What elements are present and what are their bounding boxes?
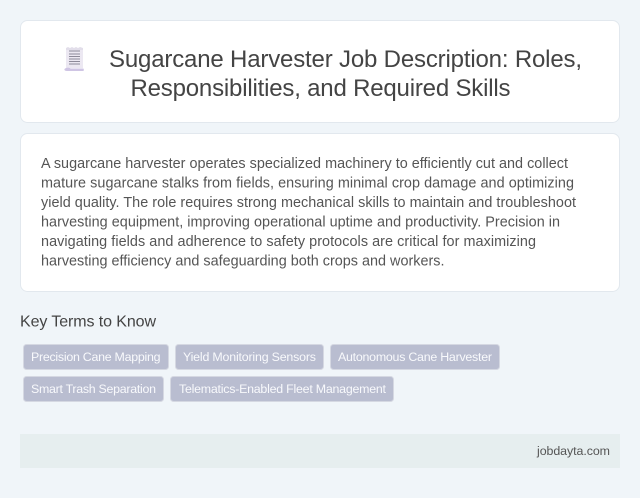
icon: document scroll xyxy=(64,47,84,71)
description text xyxy=(41,156,576,270)
description text: harvesting equipment, improving operational uptime and productivity. Precision in xyxy=(41,214,560,230)
tag: Autonomous Cane Harvester: Autonomous Cane Harvester xyxy=(338,350,492,364)
tag: Autonomous Cane Harvester xyxy=(330,344,500,370)
tag: Precision Cane Mapping xyxy=(24,344,168,370)
panel: title card xyxy=(20,20,620,122)
tag: Yield Monitoring Sensors xyxy=(176,344,324,370)
title: Sugarcane Harvester Job Description: Roles, xyxy=(109,46,582,73)
tag: Telematics-Enabled Fleet Management xyxy=(170,376,394,402)
description text: A sugarcane harvester operates specialized machinery to efficiently cut and collect xyxy=(41,156,568,172)
footer source text: jobdayta.com xyxy=(536,444,610,458)
footer bar xyxy=(20,434,620,468)
tag: Telematics-Enabled Fleet Management: Telematics-Enabled Fleet Management xyxy=(179,382,387,396)
tag: Precision Cane Mapping: Precision Cane Mapping xyxy=(31,350,161,364)
description text: navigating fields and adherence to safety protocols are critical for maximizing xyxy=(41,234,536,250)
tag: Yield Monitoring Sensors: Yield Monitoring Sensors xyxy=(183,350,316,364)
description text: yield quality. The role requires strong mechanical skills to maintain and troubleshoot xyxy=(41,195,576,211)
title: Responsibilities, and Required Skills xyxy=(130,75,510,102)
heading: key terms: Key Terms to Know xyxy=(20,314,156,330)
tag: Smart Trash Separation: Smart Trash Separation xyxy=(31,382,156,396)
description text: harvesting efficiency and safeguarding both crops and workers. xyxy=(41,254,444,270)
description text: mature sugarcane stalks from fields, ensuring minimal crop damage and optimizing xyxy=(41,176,574,192)
tag: Smart Trash Separation xyxy=(24,376,164,402)
title xyxy=(109,46,582,102)
panel: description card xyxy=(20,134,620,292)
